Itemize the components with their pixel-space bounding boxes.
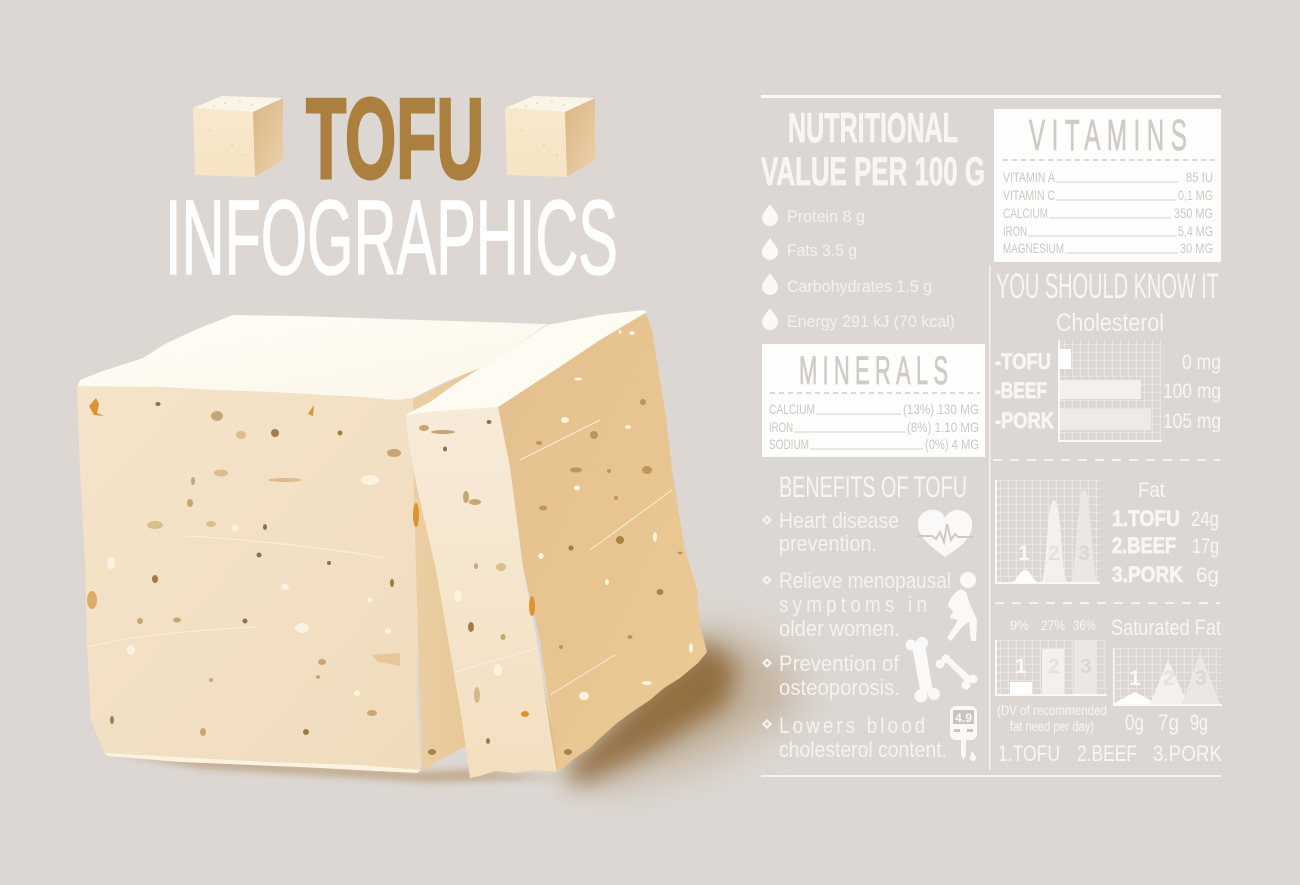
heading: nutritional value: NUTRITIONAL	[788, 104, 958, 151]
legend: tofu beef pork: 3.PORK	[1153, 741, 1222, 766]
nutrient: protein	[762, 204, 865, 226]
benefit: osteoporosis: osteoporosis.	[779, 675, 900, 700]
percentage labels	[1010, 617, 1096, 633]
panel: minerals: (8%) 1.10 MG	[907, 419, 979, 435]
nutrient: fats: Fats 3.5 g	[787, 241, 857, 260]
benefit: cholesterol	[762, 715, 947, 762]
cholesterol labels	[995, 349, 1221, 433]
title: INFOGRAPHICS: INFOGRAPHICS	[165, 179, 618, 297]
icon: small tofu cube left	[193, 96, 283, 177]
tofu holes: brown	[110, 399, 682, 755]
panel: vitamins: VITAMIN A	[1003, 169, 1055, 185]
area chart: fat	[995, 480, 1100, 584]
bar chart: daily value	[995, 640, 1107, 696]
benefit: menopausal symptoms: Relieve menopausal	[779, 568, 951, 593]
panel frame rules	[761, 95, 1221, 777]
cholesterol labels: -TOFU	[995, 349, 1051, 374]
panel: vitamins: IRON	[1003, 223, 1027, 239]
list: benefits	[762, 508, 951, 762]
panel: vitamins	[994, 109, 1221, 262]
fat legend: 3.PORK	[1112, 562, 1183, 587]
area chart: saturated fat	[1113, 648, 1222, 706]
panel: minerals: SODIUM	[769, 436, 809, 452]
tofu holes: orange	[87, 398, 535, 717]
percentage labels: 9%	[1010, 617, 1029, 633]
panel: minerals: (13%) 130 MG	[903, 401, 979, 417]
note: daily value: fat need per day)	[1010, 719, 1094, 734]
slice: front face	[406, 407, 557, 778]
nutrient: energy	[762, 308, 955, 331]
title: TOFU: TOFU	[306, 76, 484, 203]
slice: surface scratches	[455, 420, 672, 695]
panel: vitamins: 0,1 MG	[1178, 187, 1213, 203]
fat legend: 2.BEEF	[1112, 533, 1176, 558]
cholesterol labels: 105 mg	[1163, 410, 1221, 433]
cast shadow	[110, 625, 805, 792]
heading: benefits of tofu: BENEFITS OF TOFU	[779, 471, 967, 504]
block: surface scratches	[87, 536, 385, 647]
block: inner right face	[411, 366, 560, 771]
benefit: heart disease: Heart disease	[779, 508, 899, 533]
cholesterol labels: 100 mg	[1163, 380, 1221, 403]
benefit: cholesterol: Lowers blood	[779, 715, 925, 738]
fat legend: 6g	[1196, 564, 1219, 587]
legend: tofu beef pork: 2.BEEF	[1077, 741, 1137, 766]
saturated fat values: 9g	[1190, 710, 1208, 735]
nutrient: carbohydrates: Carbohydrates 1.5 g	[787, 277, 932, 296]
tofu holes: light flecks	[107, 330, 693, 700]
list: nutrition facts	[762, 204, 955, 331]
slice: top face	[405, 310, 647, 415]
area chart: fat: 3	[1078, 542, 1090, 565]
legend: tofu beef pork	[998, 741, 1222, 766]
icon: small bone	[936, 654, 978, 690]
panel: minerals: MINERALS	[799, 348, 948, 393]
area chart: saturated fat: 3	[1195, 667, 1207, 690]
fat legend	[1112, 479, 1219, 587]
bar chart: cholesterol	[1058, 340, 1162, 442]
area chart: saturated fat: 1	[1129, 667, 1141, 690]
panel: vitamins: CALCIUM	[1003, 205, 1048, 221]
benefit: heart disease: prevention.	[779, 531, 877, 556]
bar chart: daily value: 1	[1015, 655, 1027, 678]
saturated fat values	[1125, 710, 1208, 735]
block: bottom edge highlight	[104, 753, 421, 773]
icon: small tofu cube right	[505, 96, 595, 177]
cholesterol labels: -BEEF	[995, 378, 1047, 403]
icon: glucose meter: 4.9	[955, 711, 972, 725]
percentage labels: 36%	[1073, 617, 1096, 633]
legend: tofu beef pork: 1.TOFU	[998, 741, 1060, 766]
heading: nutritional value: VALUE PER 100 G	[761, 150, 985, 194]
fat legend: 1.TOFU	[1112, 506, 1180, 531]
fat legend: Fat	[1138, 479, 1165, 502]
panel: vitamins: MAGNESIUM	[1003, 240, 1064, 256]
benefit: menopausal symptoms: older women.	[779, 616, 900, 641]
benefit: menopausal symptoms: symptoms in	[779, 594, 927, 617]
saturated fat values: 7g	[1158, 710, 1179, 735]
fat legend: 17g	[1192, 535, 1219, 558]
block: top face	[77, 315, 547, 400]
benefit: osteoporosis: Prevention of	[779, 651, 900, 676]
bar chart: daily value: 2	[1048, 655, 1060, 678]
area chart: fat: 2	[1048, 542, 1060, 565]
cholesterol labels: 0 mg	[1182, 351, 1221, 374]
panel: minerals: CALCIUM	[769, 401, 815, 417]
panel: vitamins: 30 MG	[1180, 240, 1213, 256]
title block	[165, 76, 618, 297]
panel: minerals	[762, 344, 985, 457]
icon: heart with pulse	[917, 510, 974, 557]
main tofu illustration	[77, 310, 805, 792]
bar chart: daily value: 3	[1080, 655, 1092, 678]
heading: nutritional value	[761, 104, 985, 194]
icon: glucose meter	[950, 706, 977, 761]
percentage labels: 27%	[1041, 617, 1065, 633]
block: front face	[77, 386, 421, 770]
area chart: saturated fat: 2	[1163, 667, 1175, 690]
benefit: menopausal symptoms	[762, 568, 951, 641]
nutrient: fats	[762, 238, 857, 260]
slice: side face	[498, 312, 707, 772]
nutrient: carbohydrates	[762, 273, 932, 296]
heading: saturated fat: Saturated Fat	[1111, 615, 1221, 640]
panel: vitamins: 5,4 MG	[1178, 223, 1213, 239]
panel: vitamins: 350 MG	[1174, 205, 1213, 221]
fat legend: 24g	[1191, 508, 1219, 531]
panel: minerals: (0%) 4 MG	[925, 436, 979, 452]
heading: cholesterol: Cholesterol	[1056, 309, 1164, 337]
panel: vitamins: VITAMIN C	[1003, 187, 1055, 203]
icon: walking person	[947, 572, 977, 641]
right information panel	[761, 95, 1222, 777]
area chart: fat: 1	[1018, 542, 1030, 565]
icon: large bone	[906, 637, 940, 702]
panel: minerals: IRON	[769, 419, 793, 435]
benefit: osteoporosis	[762, 651, 900, 700]
nutrient: protein: Protein 8 g	[787, 207, 865, 226]
benefit: heart disease	[762, 508, 899, 556]
panel: vitamins: 85 IU	[1186, 169, 1213, 185]
cholesterol labels: -PORK	[995, 408, 1054, 433]
note: daily value	[997, 703, 1107, 734]
saturated fat values: 0g	[1125, 710, 1144, 735]
benefit: cholesterol: cholesterol content.	[779, 737, 947, 762]
panel: vitamins: VITAMINS	[1029, 110, 1187, 160]
nutrient: energy: Energy 291 kJ (70 kcal)	[787, 312, 955, 331]
note: daily value: (DV of recommended	[997, 703, 1107, 718]
